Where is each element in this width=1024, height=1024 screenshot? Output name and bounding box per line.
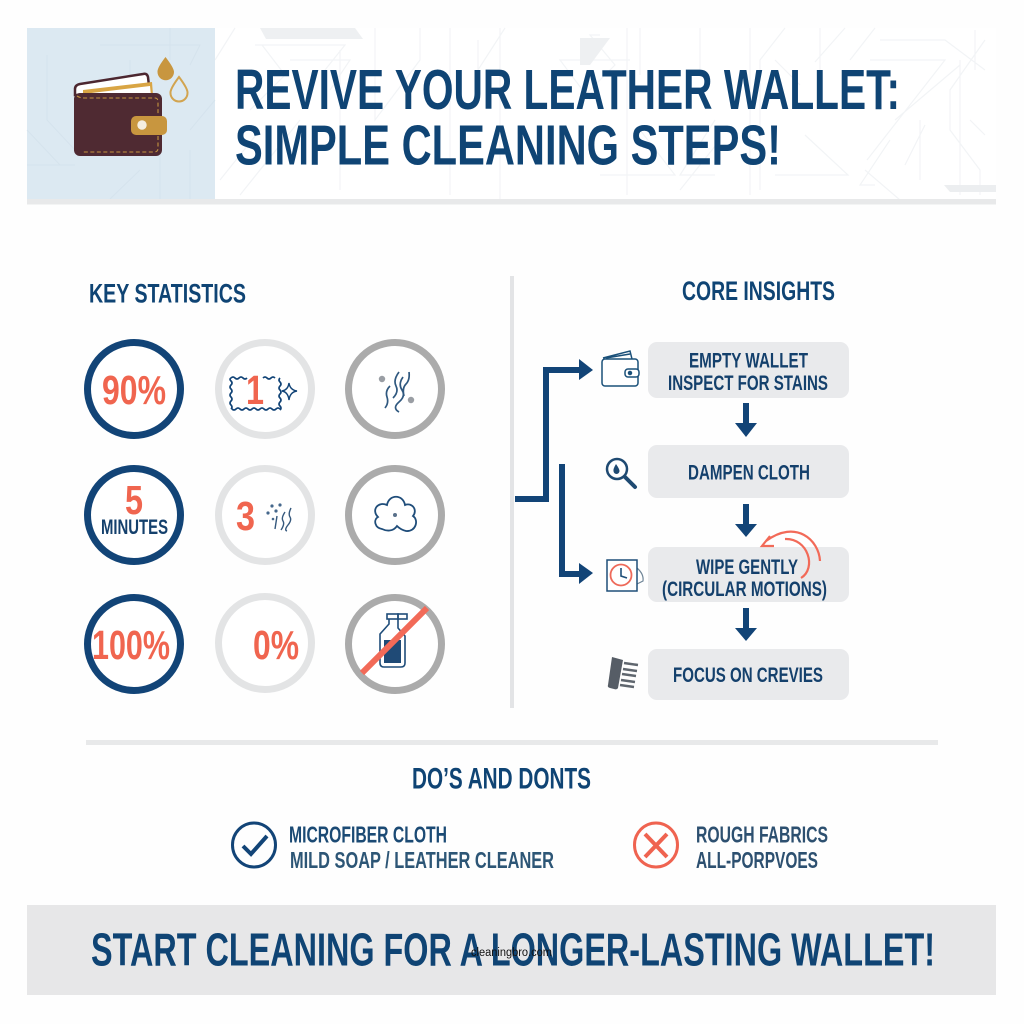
icon: wallet with oil drops [74, 57, 188, 156]
text: dont items [696, 822, 828, 873]
stat: 100% [88, 598, 180, 690]
panel: key statistics [88, 278, 442, 690]
step: empty wallet: EMPTY WALLET [689, 348, 808, 372]
icon: magnifier [607, 459, 635, 487]
icon: check [232, 823, 276, 867]
stat: no harsh chemicals [348, 598, 442, 690]
arrow: down 3 [735, 608, 757, 641]
title [235, 58, 900, 178]
icon: brush [608, 657, 638, 689]
title: SIMPLE CLEANING STEPS! [235, 114, 781, 178]
step: wipe gently: (CIRCULAR MOTIONS) [662, 577, 827, 601]
stat: 1 cloth [218, 342, 312, 436]
text: dont items: ALL-PORPVOES [696, 847, 818, 873]
step: empty wallet: INSPECT FOR STAINS [668, 371, 828, 395]
step: wipe gently [648, 547, 849, 602]
text: do items: MICROFIBER CLOTH [289, 822, 447, 848]
light blue icon panel [27, 28, 215, 199]
stat: 0% [218, 596, 312, 690]
text: do items: MILD SOAP / LEATHER CLEANER [290, 847, 554, 873]
stat: 1 cloth: 1 [246, 367, 264, 413]
step: focus on crevies: FOCUS ON CREVIES [673, 663, 823, 687]
stat: 5 minutes: MINUTES [101, 516, 168, 539]
stat: cotton flower icon [348, 468, 442, 562]
heading: dos and donts: DO’S AND DONTS [412, 762, 591, 796]
arrow: down 2 [735, 504, 757, 537]
horizontal divider [86, 740, 938, 745]
arrow: connector to first step [515, 359, 593, 499]
icon: wallet outline [602, 351, 639, 386]
icon: circular motion arrows [762, 532, 820, 578]
step: focus on crevies [648, 649, 849, 700]
text: dont items: ROUGH FABRICS [696, 822, 828, 848]
panel: core insights [515, 276, 849, 700]
header banner [27, 28, 996, 204]
step: wipe gently: WIPE GENTLY [696, 555, 798, 579]
heading: key statistics: KEY STATISTICS [89, 278, 246, 308]
heading: core insights: CORE INSIGHTS [682, 276, 835, 306]
stat: 90%: 90% [102, 367, 166, 413]
text: do items [289, 822, 554, 873]
watermark: cleaningbro.com [471, 947, 552, 959]
arrow: down 1 [735, 403, 757, 437]
step: dampen cloth [648, 445, 849, 498]
step: empty wallet [648, 342, 849, 398]
panel: dos and donts [232, 762, 828, 873]
stat: odor icon [348, 342, 442, 436]
step: dampen cloth: DAMPEN CLOTH [688, 460, 810, 484]
stat: 3 and particles [218, 468, 312, 562]
stat: 3 and particles: 3 [236, 493, 255, 539]
stat: 5 minutes: 5 [125, 477, 143, 523]
icon: timer card [607, 560, 643, 591]
stat: 0%: 0% [253, 622, 299, 668]
icon: cross [634, 823, 678, 867]
arrow: connector to third step [562, 464, 593, 584]
stat: 90% [88, 342, 180, 436]
stat: 100%: 100% [92, 622, 170, 668]
stat: 5 minutes [88, 468, 180, 562]
footer banner [27, 905, 996, 995]
vertical divider [510, 276, 514, 708]
